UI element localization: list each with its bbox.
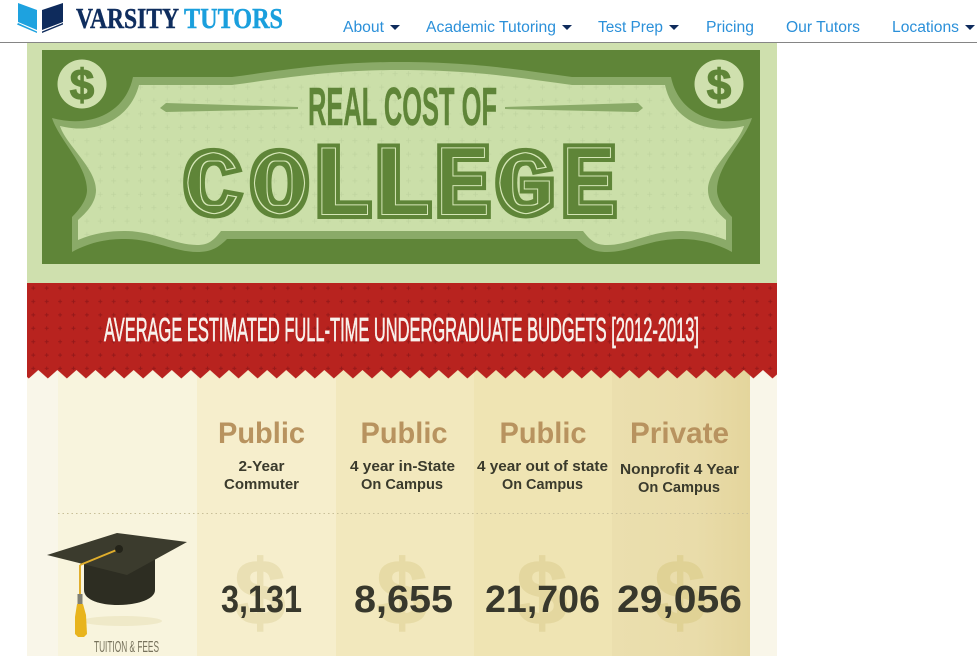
logo wordmark: VARSITY xyxy=(76,4,179,35)
column header: public 4 year in-state: Public xyxy=(360,417,448,450)
title: college: O xyxy=(250,137,309,243)
column header: public 4 year in-state: On Campus xyxy=(361,477,443,493)
navigation menu: Test Prep xyxy=(598,19,663,36)
title: college: G xyxy=(495,137,555,243)
value: 29,056 xyxy=(617,542,742,644)
logo wordmark: TUTORS xyxy=(184,4,283,35)
navigation menu: Locations xyxy=(892,19,959,36)
column header: public 4 year in-state xyxy=(350,417,455,493)
column header: private nonprofit xyxy=(620,417,739,496)
panel: dollar bill title banner xyxy=(27,43,777,283)
column header: private nonprofit: On Campus xyxy=(638,480,720,496)
column header: public 4 year out of state: 4 year out of state xyxy=(477,459,608,475)
column header: public 4 year out of state: Public xyxy=(500,417,586,450)
icon: left dollar coin xyxy=(58,60,106,110)
site header xyxy=(0,0,977,43)
bill inner panel xyxy=(60,70,744,245)
column header: public 2-year commuter: Commuter xyxy=(224,477,299,493)
row label: tuition and fees: TUITION & FEES xyxy=(94,639,159,656)
icon: right dollar coin: $ xyxy=(707,61,731,110)
column header: private nonprofit: Nonprofit 4 Year xyxy=(620,462,739,478)
value: 21,706: 21,706 xyxy=(485,579,600,621)
value: 8,655: $ xyxy=(376,542,428,644)
title: college: L xyxy=(310,130,374,248)
value: 21,706 xyxy=(485,542,600,644)
column header: private nonprofit: Private xyxy=(630,417,729,450)
column header: public 4 year in-state: 4 year in-State xyxy=(350,459,455,475)
value: 3,131: $ xyxy=(234,542,286,644)
title: college: C xyxy=(183,137,242,243)
panel: budget table xyxy=(27,365,777,656)
column header: public 2-year commuter: Public xyxy=(218,417,305,450)
column header: public 4 year out of state: On Campus xyxy=(502,477,583,493)
value: 29,056: 29,056 xyxy=(617,579,742,621)
icon: left dollar coin: $ xyxy=(70,61,94,110)
title: college xyxy=(183,130,618,248)
value: 3,131: 3,131 xyxy=(221,579,302,621)
navigation menu: Academic Tutoring xyxy=(426,19,556,36)
title: college: L xyxy=(370,130,434,248)
panel: dollar bill title banner: REAL COST OF xyxy=(308,77,497,137)
value: 21,706: $ xyxy=(516,542,568,644)
navigation menu: About xyxy=(343,19,385,36)
column header: public 2-year commuter xyxy=(218,417,305,493)
navigation menu: Our Tutors xyxy=(786,19,860,36)
column header: public 4 year out of state xyxy=(477,417,608,493)
icon: graduation cap xyxy=(47,533,187,637)
navigation menu: Pricing xyxy=(706,19,754,36)
icon: open book logo xyxy=(17,3,63,33)
left ornament xyxy=(160,103,298,112)
value: 29,056: $ xyxy=(654,542,706,644)
value: 8,655 xyxy=(354,542,453,644)
value: 3,131 xyxy=(221,542,302,644)
value: 8,655: 8,655 xyxy=(354,579,453,621)
panel: red ribbon heading xyxy=(27,283,777,378)
title: college: E xyxy=(560,130,618,248)
title: college: E xyxy=(434,130,492,248)
navigation menu xyxy=(343,19,975,36)
icon: right dollar coin xyxy=(694,60,744,110)
bill frame border xyxy=(52,62,752,252)
right ornament xyxy=(505,103,643,112)
column header: public 2-year commuter: 2-Year xyxy=(238,459,285,475)
